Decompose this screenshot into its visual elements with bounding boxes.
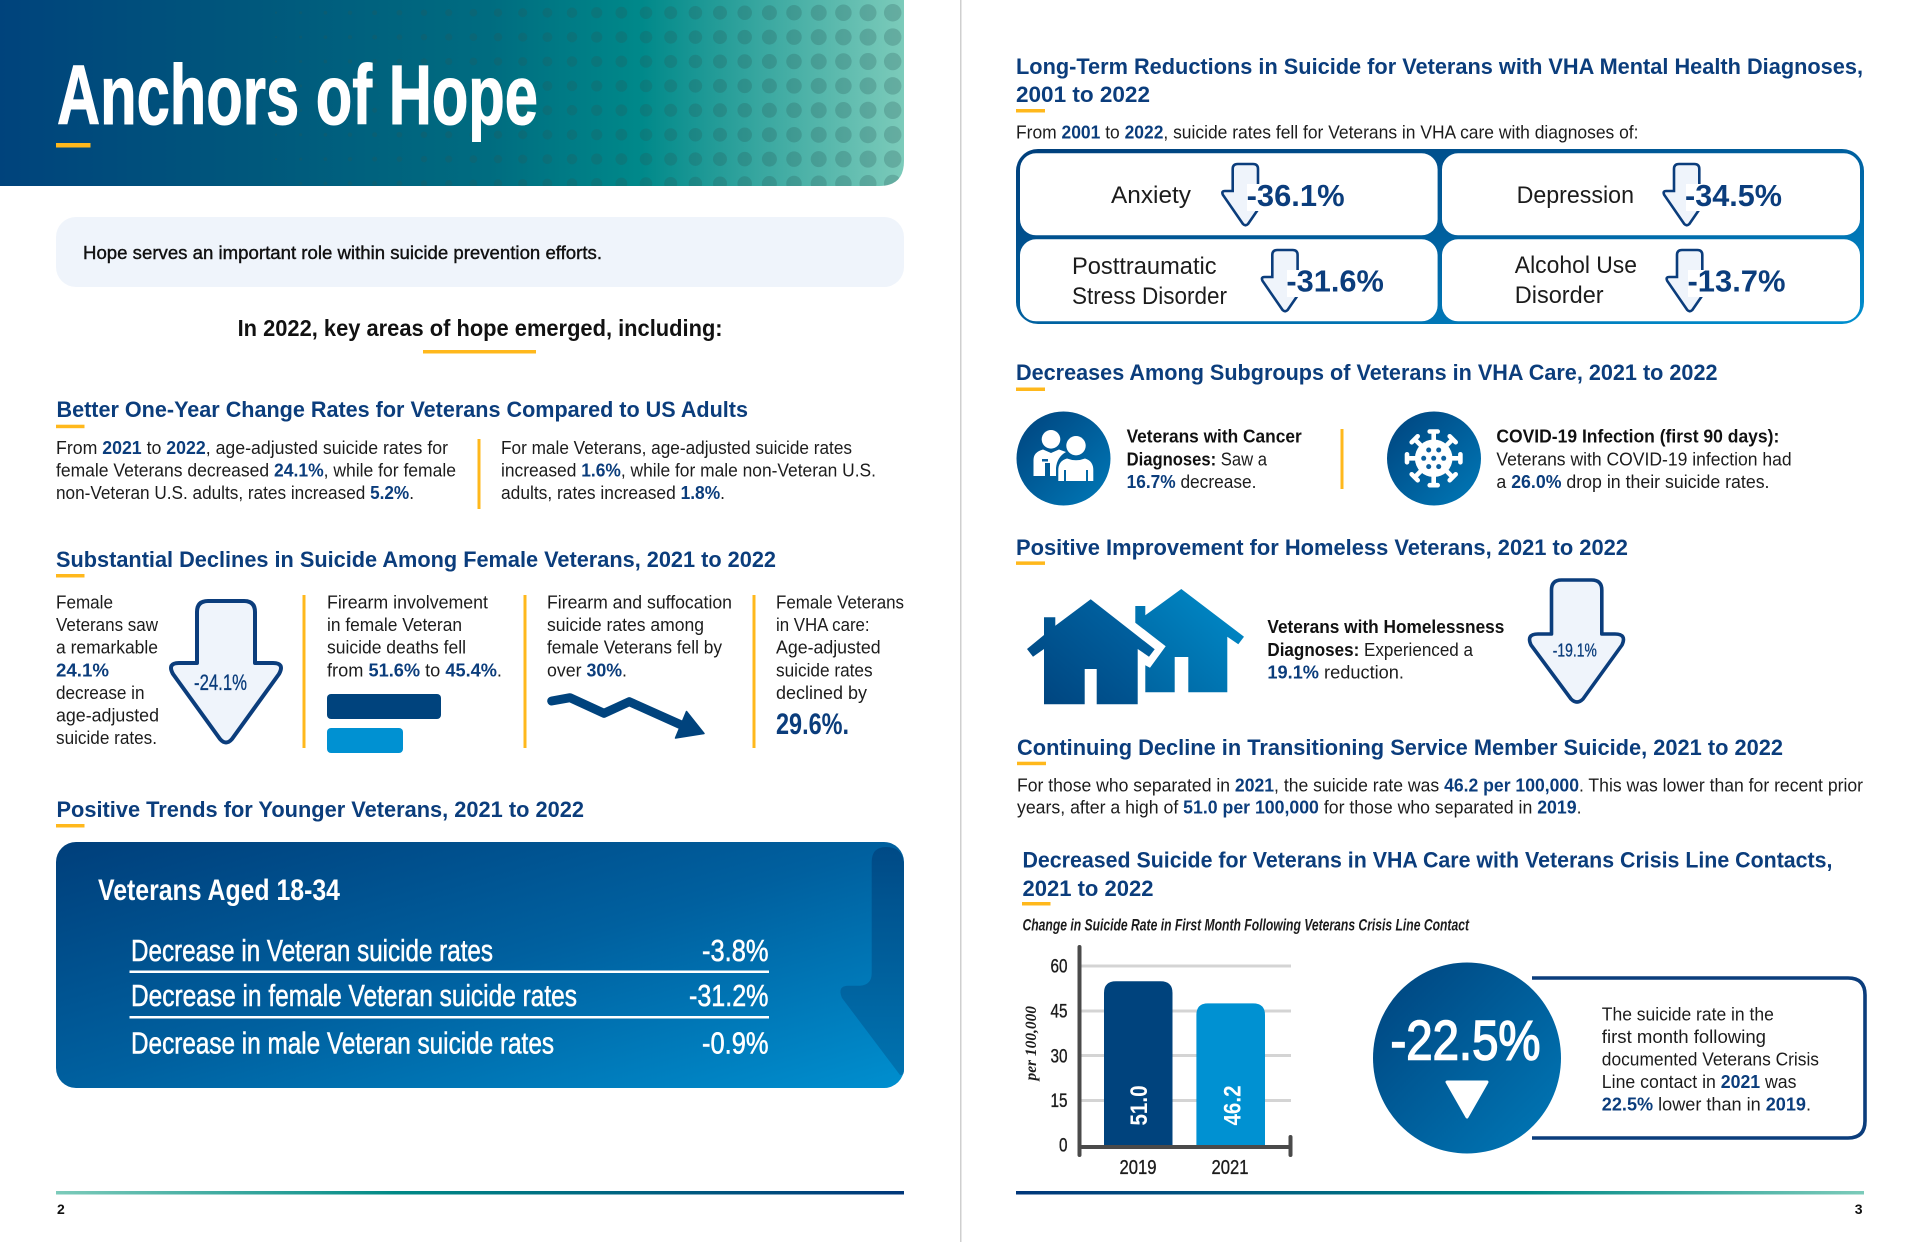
cell: alcohol use disorder: Alcohol Use	[1515, 252, 1637, 279]
text: cancer: 16.7% decrease.	[1127, 472, 1256, 492]
column 2 text: suicide deaths fell	[327, 638, 466, 658]
text: homelessness: Diagnoses: Experienced a	[1267, 640, 1474, 660]
female veterans text: female Veterans decreased 24.1%, while for female	[56, 460, 456, 480]
column 1 text: Veterans saw	[56, 615, 159, 635]
bar comparison icon	[327, 694, 441, 753]
y-axis labels: 45	[1050, 1002, 1068, 1023]
y-axis labels: 60	[1050, 957, 1068, 978]
callout frame	[1532, 978, 1865, 1138]
cell: anxiety	[1020, 153, 1438, 235]
intro box: Hope serves an important role within suicide prevention efforts.	[83, 242, 602, 263]
cell: ptsd	[1020, 239, 1438, 321]
page number 3: 3	[1855, 1201, 1863, 1217]
column 1 text: age-adjusted	[56, 706, 159, 726]
icon: down arrow -24.1%	[171, 601, 281, 742]
paragraph	[1017, 776, 1863, 818]
text: covid: COVID-19 Infection (first 90 days):	[1496, 427, 1779, 447]
heading: Positive Improvement for Homeless Veterans, 2021 to 2022	[1016, 535, 1628, 560]
column 1 text: 24.1%	[56, 660, 109, 680]
footer rule left	[56, 1191, 904, 1194]
text: homelessness: 19.1% reduction.	[1267, 662, 1404, 682]
row: female: -31.2%	[689, 978, 768, 1013]
bar 2021: 46.2	[1220, 1086, 1246, 1126]
column 3 text: Firearm and suffocation	[547, 592, 732, 612]
heading: Decreased Suicide for Veterans in VHA Care with Veterans Crisis Line Contacts,	[1022, 848, 1832, 873]
icon: down arrow -19.1%: -19.1%	[1553, 641, 1597, 661]
column 1 text	[56, 592, 159, 748]
title accent	[56, 143, 90, 148]
y-axis labels: 30	[1050, 1046, 1068, 1067]
column 4 text: suicide rates	[776, 660, 873, 680]
cell: ptsd: -31.6%	[1286, 264, 1384, 299]
y-axis title: per 100,000	[1023, 1006, 1040, 1082]
text: homelessness	[1267, 617, 1504, 682]
callout text: documented Veterans Crisis	[1602, 1050, 1819, 1070]
panel: veterans aged 18-34: Veterans Aged 18-34	[98, 874, 340, 907]
text: covid: a 26.0% drop in their suicide rates.	[1496, 472, 1770, 492]
section: veterans crisis line	[1022, 848, 1865, 1179]
icon: down arrow -24.1%: -24.1%	[194, 670, 247, 695]
chart axes	[1080, 947, 1290, 1155]
icon: trend arrow	[552, 698, 704, 738]
bar 2019	[1104, 981, 1172, 1147]
column 1 text: suicide rates.	[56, 728, 157, 748]
page divider	[960, 0, 962, 1242]
column 4 text	[776, 592, 904, 741]
column 4 text: declined by	[776, 683, 867, 703]
heading: Substantial Declines in Suicide Among Female Veterans, 2021 to 2022	[56, 547, 776, 572]
circle stat	[1373, 962, 1561, 1154]
heading: Positive Trends for Younger Veterans, 2021 to 2022	[56, 797, 584, 822]
column 3 text: female Veterans fell by	[547, 638, 722, 658]
column 4 text: Age-adjusted	[776, 638, 881, 658]
header banner	[0, 0, 904, 195]
icon: virus	[1387, 412, 1481, 506]
cell: alcohol use disorder: Disorder	[1515, 282, 1604, 309]
female veterans text	[56, 438, 456, 503]
column 4 text: 29.6%.	[776, 708, 849, 741]
icon: houses	[1027, 589, 1244, 704]
y-axis labels: 0	[1059, 1136, 1068, 1157]
section: subgroups	[1016, 360, 1792, 506]
text: covid	[1496, 427, 1792, 492]
female veterans text: From 2021 to 2022, age-adjusted suicide rates for	[56, 438, 448, 458]
x-axis labels	[1120, 1157, 1248, 1179]
male veterans text: increased 1.6%, while for male non-Veteran U.S.	[501, 460, 876, 480]
column 2 text: from 51.6% to 45.4%.	[327, 660, 502, 680]
text: cancer	[1127, 427, 1302, 492]
column 3 text: suicide rates among	[547, 615, 704, 635]
callout text	[1602, 1004, 1819, 1115]
icon: down arrow -19.1%	[1530, 580, 1623, 702]
column 1 text: a remarkable	[56, 638, 158, 658]
column 2 text: Firearm involvement	[327, 592, 488, 612]
panel: veterans aged 18-34	[56, 842, 904, 1088]
paragraph: For those who separated in 2021, the suicide rate was 46.2 per 100,000. This was lower than for recent prior	[1017, 776, 1863, 796]
x-axis labels: 2021	[1212, 1157, 1248, 1179]
cell: anxiety: -36.1%	[1247, 178, 1345, 213]
callout text: 22.5% lower than in 2019.	[1602, 1095, 1811, 1115]
cell: alcohol use disorder	[1442, 239, 1860, 321]
callout text: first month following	[1602, 1027, 1766, 1047]
circle stat: -22.5%	[1390, 1009, 1540, 1072]
male veterans text: For male Veterans, age-adjusted suicide rates	[501, 438, 852, 458]
page number 2: 2	[57, 1201, 65, 1217]
heading: Continuing Decline in Transitioning Service Member Suicide, 2021 to 2022	[1017, 735, 1783, 760]
heading: Better One-Year Change Rates for Veterans Compared to US Adults	[56, 397, 748, 422]
intro text: From 2001 to 2022, suicide rates fell for Veterans in VHA care with diagnoses of:	[1016, 123, 1638, 143]
section: transitioning service members	[1017, 735, 1863, 818]
cell: depression	[1442, 153, 1860, 235]
y-axis labels: 15	[1050, 1091, 1068, 1112]
cell: alcohol use disorder: -13.7%	[1688, 264, 1786, 299]
bar chart	[1023, 947, 1291, 1179]
cell: depression: -34.5%	[1685, 178, 1782, 213]
callout text: Line contact in 2021 was	[1602, 1072, 1796, 1092]
cell: ptsd: Posttraumatic	[1072, 253, 1217, 280]
bar 2019: 51.0	[1126, 1086, 1153, 1126]
column 1 text: decrease in	[56, 683, 144, 703]
row: veteran: -3.8%	[702, 933, 768, 968]
male veterans text	[501, 438, 876, 503]
paragraph: years, after a high of 51.0 per 100,000 for those who separated in 2019.	[1017, 798, 1582, 818]
section: female veterans declines	[56, 547, 904, 753]
text: cancer: Veterans with Cancer	[1127, 427, 1302, 447]
row: veteran: Decrease in Veteran suicide rates	[131, 933, 493, 968]
bar 2021	[1196, 1003, 1265, 1147]
heading: 2001 to 2022	[1016, 82, 1150, 107]
icon: people	[1016, 412, 1110, 506]
column 4 text: Female Veterans	[776, 592, 904, 612]
heading	[1016, 54, 1863, 112]
column 2 text	[327, 592, 502, 680]
section: younger veterans	[56, 797, 904, 1088]
y-axis labels	[1050, 957, 1068, 1157]
heading	[1022, 848, 1832, 906]
cell: depression: Depression	[1517, 182, 1634, 209]
cell: anxiety: Anxiety	[1111, 182, 1191, 209]
subtitle	[238, 315, 723, 354]
column 3 text	[547, 592, 732, 680]
column 1 text: Female	[56, 592, 113, 612]
cell: ptsd: Stress Disorder	[1072, 283, 1227, 310]
text: cancer: Diagnoses: Saw a	[1127, 450, 1268, 470]
column 2 text: in female Veteran	[327, 615, 462, 635]
footer rule right	[1016, 1191, 1864, 1194]
text: homelessness: Veterans with Homelessness	[1267, 617, 1504, 637]
row: female: Decrease in female Veteran suicide rates	[131, 978, 577, 1013]
callout text: The suicide rate in the	[1602, 1004, 1774, 1024]
row: male: -0.9%	[702, 1026, 768, 1060]
text: covid: Veterans with COVID-19 infection had	[1496, 450, 1792, 470]
callout	[1373, 962, 1865, 1154]
column 4 text: in VHA care:	[776, 615, 870, 635]
diagnoses grid	[1016, 149, 1864, 324]
heading: 2021 to 2022	[1022, 876, 1154, 901]
subtitle: In 2022, key areas of hope emerged, including:	[238, 315, 723, 341]
intro box	[56, 217, 904, 287]
section: one-year change rates	[56, 397, 876, 509]
section: long-term reductions	[1016, 54, 1864, 324]
column 3 text: over 30%.	[547, 660, 627, 680]
heading: Long-Term Reductions in Suicide for Veterans with VHA Mental Health Diagnoses,	[1016, 54, 1863, 79]
male veterans text: adults, rates increased 1.8%.	[501, 483, 725, 503]
heading: Decreases Among Subgroups of Veterans in VHA Care, 2021 to 2022	[1016, 360, 1718, 385]
chart subtitle: Change in Suicide Rate in First Month Following Veterans Crisis Line Contact	[1022, 916, 1470, 935]
x-axis labels: 2019	[1120, 1157, 1156, 1179]
row: male: Decrease in male Veteran suicide rates	[131, 1026, 554, 1060]
female veterans text: non-Veteran U.S. adults, rates increased 5.2%.	[56, 483, 414, 503]
section: homeless veterans	[1016, 535, 1628, 704]
title: Anchors of Hope	[57, 48, 538, 142]
